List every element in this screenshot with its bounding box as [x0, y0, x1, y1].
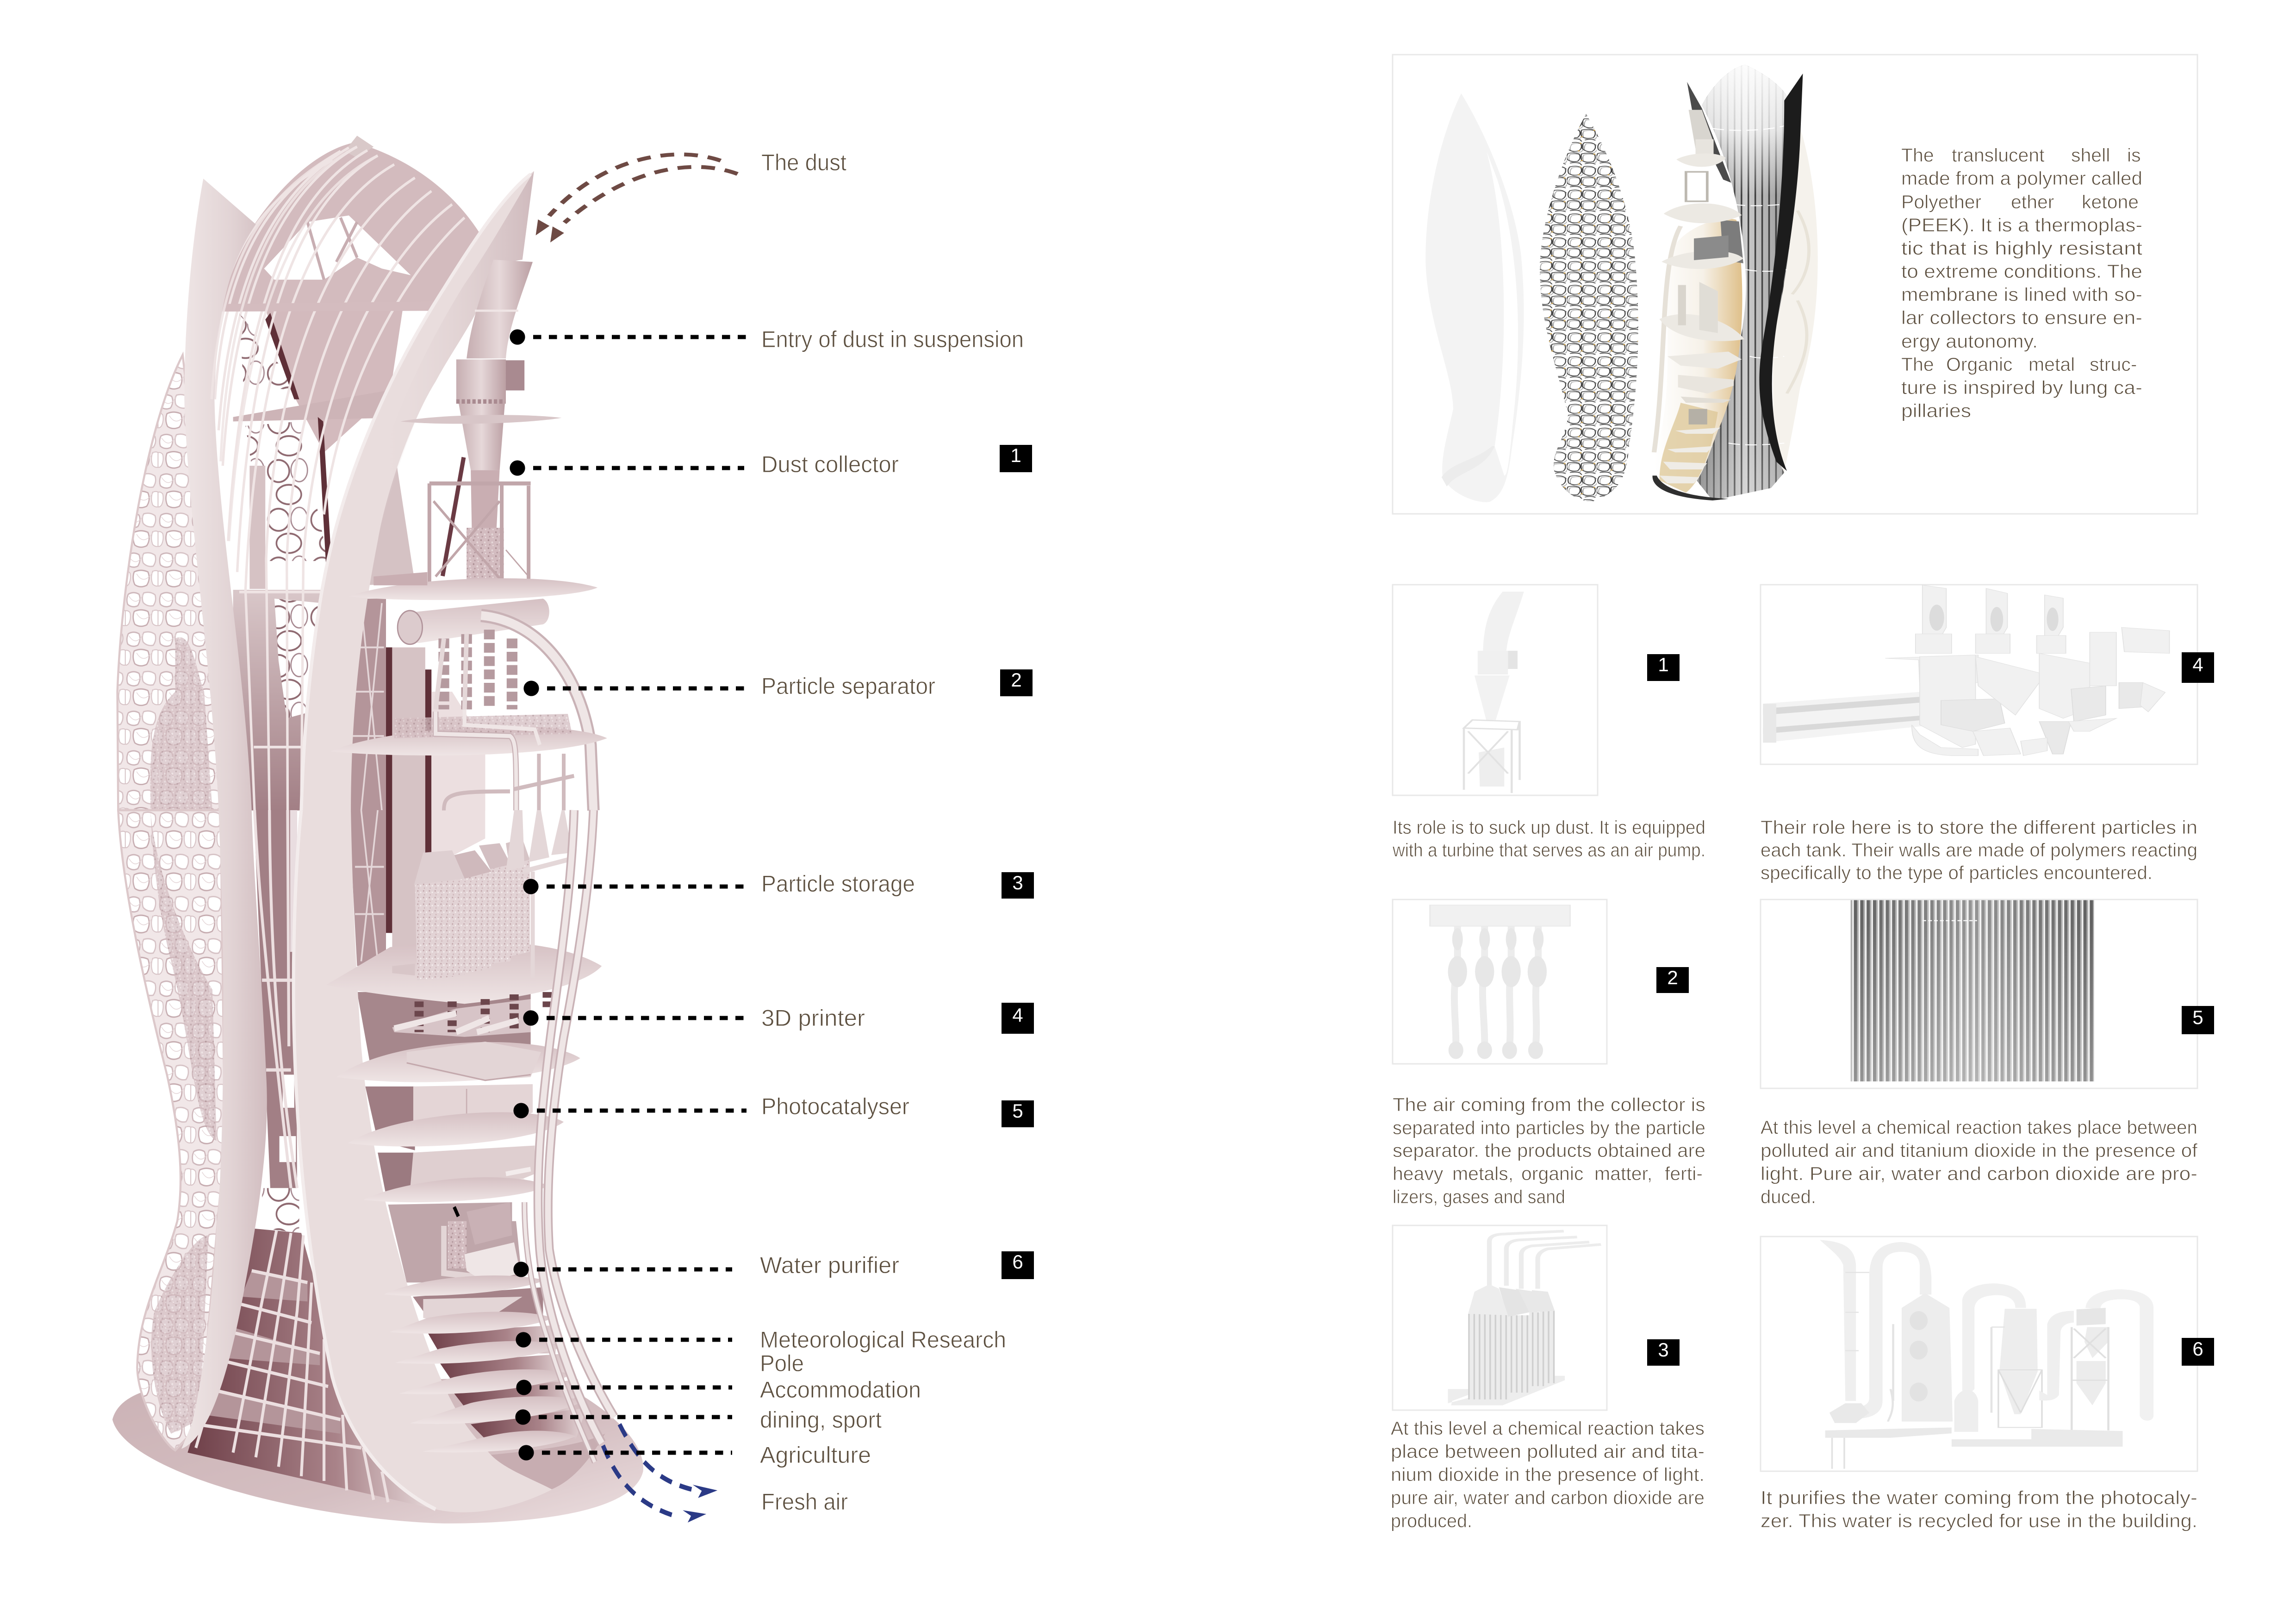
- text: storage reaction: produced.: [1391, 1510, 1472, 1531]
- lattice tower behind floors: [349, 599, 386, 811]
- dome roof: [214, 142, 481, 311]
- text: photocatalyser role: At this level a chemical reaction takes place between: [1761, 1117, 2197, 1138]
- text: separator role: matter,: [1594, 1163, 1652, 1184]
- tower number badges: 6: [1012, 1251, 1023, 1273]
- text: separator role: [1393, 1094, 1705, 1207]
- arrows: outgoing fresh air: [603, 1424, 717, 1523]
- badge 6: [2182, 1338, 2214, 1366]
- particle storage tanks: [326, 810, 602, 1004]
- shell description: lar collectors to ensure en-: [1901, 307, 2142, 328]
- translucent shell behind: [1771, 108, 1818, 473]
- upper cage and dome: [212, 136, 485, 811]
- badge 1: 1: [1658, 654, 1669, 675]
- sectional model: [1653, 65, 1818, 500]
- tower illustration: sectional view: [112, 136, 643, 1524]
- front petal blade: [293, 171, 552, 1512]
- tower labels: Agriculture: [760, 1442, 871, 1468]
- tower labels: Particle storage: [761, 871, 915, 897]
- text: separator role: ferti-: [1665, 1163, 1703, 1184]
- panel: shell, structure and cutaway: [1393, 55, 2197, 514]
- tower number badges: 2: [1011, 669, 1022, 691]
- translucent shell: [1425, 94, 1524, 502]
- dust collector with duct and support frame: [349, 260, 597, 600]
- lower level discs: [389, 1312, 585, 1452]
- level disc and photocatalyser slab: [336, 1042, 580, 1082]
- tower number badges: [1000, 444, 1034, 1279]
- interior levels and machinery: [349, 745, 605, 1489]
- background walls of the lower levels: [349, 810, 386, 966]
- shell description: membrane is lined with so-: [1901, 284, 2142, 305]
- shell description: Organic: [1946, 354, 2013, 375]
- text: purifier role: It purifies the water coming from the photocaly-: [1761, 1487, 2197, 1508]
- text: separator role: lizers, gases and sand: [1393, 1186, 1565, 1207]
- level disc: storage: [326, 942, 602, 1004]
- lower cage interior: [254, 810, 297, 1188]
- badge 2: [1656, 967, 1689, 993]
- particle separator: [330, 599, 607, 811]
- tower labels: Entry of dust in suspension: [761, 326, 1024, 352]
- shell description: ture is inspired by lung ca-: [1901, 377, 2142, 398]
- text: photocatalyser role: duced.: [1761, 1186, 1816, 1207]
- text: storage role: [1761, 817, 2197, 883]
- tower labels: Fresh air: [761, 1489, 848, 1515]
- badge 5: 5: [2192, 1006, 2203, 1028]
- shell description: translucent: [1952, 144, 2045, 166]
- shell description: is: [2127, 144, 2141, 166]
- panel 2: particle separator: [1393, 899, 1607, 1064]
- tower labels: Pole: [760, 1350, 804, 1376]
- tower number badges: 4: [1012, 1004, 1023, 1026]
- text: photocatalyser role: [1761, 1117, 2198, 1207]
- badge 1: [1647, 654, 1680, 681]
- text: storage reaction: pure air, water and carbon dioxide are: [1391, 1487, 1705, 1508]
- rear petal blade: [181, 147, 436, 1509]
- text: storage reaction: At this level a chemical reaction takes: [1391, 1418, 1705, 1439]
- text: storage reaction: [1391, 1418, 1705, 1531]
- text: separator role: organic: [1521, 1163, 1583, 1184]
- tower labels: Accommodation: [760, 1377, 921, 1403]
- ribs: [212, 147, 479, 811]
- text: collector role: with a turbine that serves as an air pump.: [1392, 839, 1705, 861]
- tower labels: Particle separator: [761, 673, 935, 699]
- text: storage role: each tank. Their walls are made of polymers reacting: [1761, 839, 2197, 861]
- riser pipes along the facade: [524, 810, 614, 1462]
- photocatalyser: [348, 1084, 564, 1202]
- tower number badges: 5: [1012, 1100, 1023, 1122]
- text: purifier role: [1761, 1487, 2197, 1531]
- shell description: [1901, 144, 2143, 421]
- ribs: [1697, 65, 1795, 500]
- text: storage reaction: nium dioxide in the presence of light.: [1391, 1464, 1705, 1485]
- dark blade: [1759, 74, 1803, 471]
- callout leaders: [510, 329, 747, 1461]
- shell description: The: [1901, 354, 1934, 375]
- badge 4: [2182, 652, 2214, 683]
- shell description: ether: [2011, 191, 2054, 212]
- text: separator role: separator. the products obtained are: [1393, 1140, 1705, 1161]
- panel 1: dust collector: [1393, 585, 1598, 795]
- tower labels: [760, 150, 1024, 1515]
- badge 2: 2: [1667, 967, 1678, 988]
- badge 6: 6: [2192, 1338, 2203, 1360]
- shell description: to extreme conditions. The: [1901, 261, 2142, 282]
- text: collector role: Its role is to suck up dust. It is equipped: [1393, 817, 1705, 838]
- tower number badges: 3: [1012, 872, 1023, 893]
- tower labels: Photocatalyser: [761, 1093, 909, 1119]
- tower labels: Water purifier: [760, 1252, 899, 1278]
- text: separator role: metals,: [1452, 1163, 1513, 1184]
- tower labels: dining, sport: [760, 1407, 882, 1433]
- shell description: made from a polymer called: [1901, 168, 2142, 189]
- badge 3: 3: [1658, 1339, 1669, 1361]
- text: storage role: Their role here is to store the different particles in: [1761, 817, 2197, 838]
- shell description: ergy autonomy.: [1901, 331, 2038, 352]
- tower labels: Meteorological Research: [760, 1327, 1006, 1353]
- tower labels: 3D printer: [761, 1005, 865, 1031]
- valves and pipes above tanks: [506, 810, 572, 872]
- interior levels: [1655, 219, 1742, 493]
- text: storage role: specifically to the type of particles encountered.: [1761, 862, 2153, 883]
- text: storage reaction: place between polluted air and tita-: [1391, 1441, 1705, 1462]
- panel 4: 3D printer: [1761, 585, 2197, 764]
- text: photocatalyser role: polluted air and titanium dioxide in the presence of: [1761, 1140, 2198, 1161]
- level disc: upper: [349, 578, 597, 600]
- panel 6: water purifier: [1761, 1237, 2197, 1471]
- tower number badges: 1: [1010, 444, 1021, 466]
- level disc: cyclone: [400, 415, 562, 424]
- shell description: Polyether: [1901, 191, 1981, 212]
- left plane: [1687, 82, 1731, 183]
- arrows: incoming dust: [536, 155, 738, 243]
- shell description: tic that is highly resistant: [1901, 237, 2143, 259]
- panel 3: storage tanks: [1393, 1225, 1607, 1410]
- text: separator role: heavy: [1393, 1163, 1444, 1184]
- text: separator role: separated into particles by the particle: [1393, 1117, 1705, 1138]
- interior back walls: [233, 311, 479, 559]
- badge 4: 4: [2192, 654, 2203, 675]
- badge 5: [2182, 1006, 2214, 1034]
- shell description: pillaries: [1901, 400, 1971, 421]
- tower labels: The dust: [761, 150, 846, 175]
- text: purifier role: zer. This water is recycled for use in the building.: [1761, 1510, 2197, 1531]
- shell description: (PEEK). It is a thermoplas-: [1901, 214, 2142, 236]
- panel 5: photocatalyser fins: [1761, 899, 2197, 1088]
- 3D printer: [336, 992, 580, 1082]
- lattice outer shell: [118, 355, 225, 1450]
- tower base disc: [112, 1377, 643, 1524]
- bottom curved wall: [489, 1434, 605, 1489]
- shell description: The: [1901, 144, 1934, 166]
- text: collector role: [1392, 817, 1705, 861]
- shell description: shell: [2071, 144, 2110, 166]
- shell description: metal: [2028, 354, 2075, 375]
- badge 3: [1647, 1339, 1680, 1366]
- water purifier: [384, 1200, 545, 1327]
- shell description: ketone: [2082, 191, 2139, 212]
- lung-capillary metal lattice: [1540, 114, 1638, 501]
- tower labels: Dust collector: [761, 451, 899, 477]
- text: photocatalyser role: light. Pure air, water and carbon dioxide are pro-: [1761, 1163, 2197, 1184]
- text: separator role: The air coming from the collector is: [1393, 1094, 1705, 1115]
- shell description: struc-: [2090, 354, 2137, 375]
